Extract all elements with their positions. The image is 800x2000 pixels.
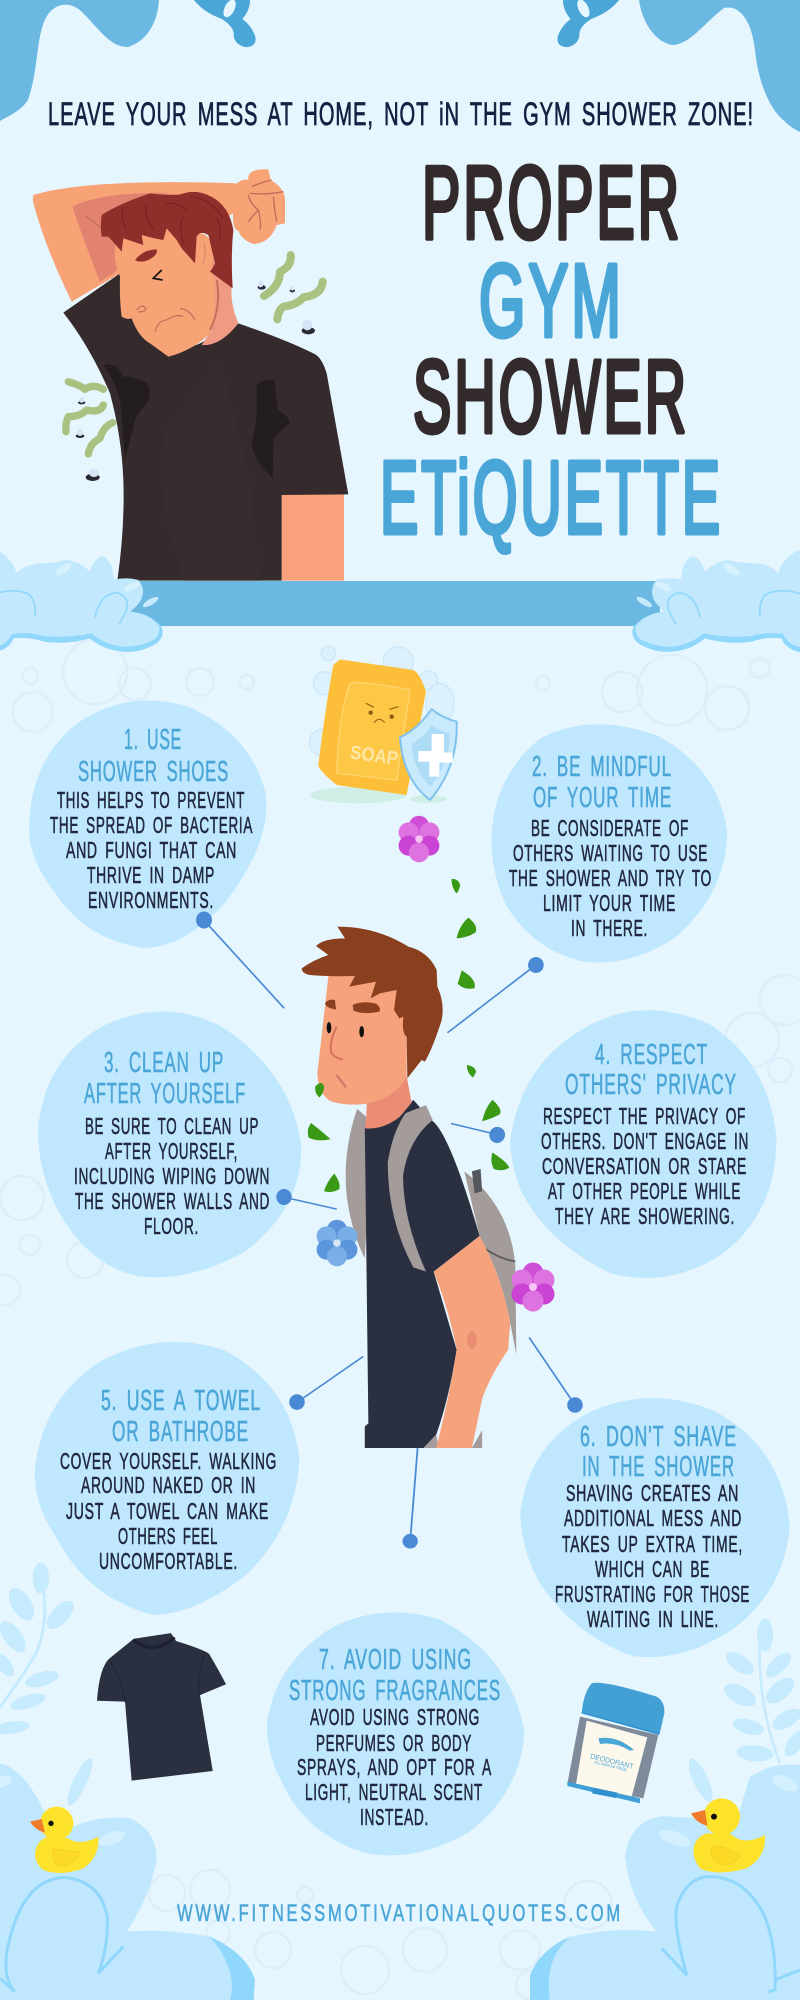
body text: PERFUMES OR BODY [316, 1730, 472, 1756]
body text: INCLUDING WIPING DOWN [74, 1163, 270, 1189]
icon: t-shirt [97, 1633, 226, 1781]
icon: deodorant stick [567, 1683, 664, 1803]
body text: ENVIRONMENTS. [88, 887, 214, 913]
panel: tip 1 shower shoes [29, 700, 266, 948]
icon: soap bar with shield [309, 646, 457, 803]
illustration: sweaty man smelling armpit [33, 169, 348, 581]
connector lines and dots upper [196, 913, 543, 1209]
body text [541, 1103, 749, 1229]
body text: OTHERS FEEL [118, 1523, 218, 1549]
body text: WHICH CAN BE [595, 1556, 710, 1582]
heading: 1. USE [124, 724, 182, 756]
heading [580, 1421, 737, 1483]
panel: tip 7 avoid strong fragrances [267, 1612, 524, 1855]
icon: soap bar with shield: SOAP [349, 742, 400, 770]
icon: deodorant stick: ALUMINUM FREE [594, 1759, 628, 1772]
body text: AVOID USING STRONG [310, 1704, 480, 1730]
heading: STRONG FRAGRANCES [289, 1675, 501, 1707]
body text: INSTEAD. [360, 1804, 429, 1830]
body text: BE SURE TO CLEAN UP [85, 1113, 259, 1139]
heading [84, 1047, 246, 1110]
panel: tip 5 towel or bathrobe [35, 1342, 305, 1615]
panel: tip 6 don't shave in the shower [520, 1397, 790, 1657]
body text: LIGHT, NEUTRAL SCENT [305, 1779, 483, 1805]
heading [565, 1039, 737, 1101]
body text: BE CONSIDERATE OF [531, 815, 689, 841]
body text: THIS HELPS TO PREVENT [57, 787, 245, 813]
heading [532, 751, 672, 814]
connector lines and dots lower [289, 1337, 583, 1549]
body text [50, 787, 253, 913]
illustration: man with backpack [302, 927, 516, 1448]
icon: rubber duck right [691, 1798, 765, 1872]
body text [297, 1704, 492, 1830]
top right water drip [639, 0, 800, 132]
heading: SHOWER SHOES [78, 756, 229, 788]
panel: tip 2 be mindful of your time [491, 724, 727, 973]
heading: OR BATHROBE [112, 1416, 249, 1448]
body text: UNCOMFORTABLE. [99, 1548, 238, 1574]
body text: AROUND NAKED OR IN [81, 1472, 256, 1498]
icon: deodorant stick: DEODORANT [590, 1752, 635, 1771]
body text: COVER YOURSELF. WALKING [60, 1448, 277, 1474]
heading: 7. AVOID USING [319, 1644, 472, 1676]
heading [78, 724, 229, 788]
splash right [557, 0, 619, 47]
heading [289, 1644, 501, 1707]
foam cloud left [0, 548, 163, 653]
leaves and flowers [308, 816, 554, 1312]
body text: JUST A TOWEL CAN MAKE [66, 1498, 269, 1524]
body text [60, 1448, 277, 1574]
splash left [194, 0, 256, 47]
heading [101, 1385, 261, 1448]
body text: THRIVE IN DAMP [87, 862, 215, 888]
foam cloud right [632, 548, 800, 653]
body text: IN THERE. [571, 915, 648, 941]
heading: OF YOUR TIME [533, 782, 672, 814]
body text [555, 1480, 750, 1632]
heading: AFTER YOURSELF [84, 1078, 246, 1110]
body text [74, 1113, 270, 1239]
body text: THE SHOWER WALLS AND [75, 1188, 270, 1214]
bottom right bubble foam [530, 1765, 800, 2000]
heading: 4. RESPECT [595, 1039, 708, 1071]
panel: tip 3 clean up after yourself [38, 1012, 301, 1277]
heading: 3. CLEAN UP [104, 1047, 224, 1079]
body text: AFTER YOURSELF, [105, 1138, 238, 1164]
title [380, 145, 723, 555]
body text: THE SPREAD OF BACTERIA [50, 812, 253, 838]
body text: SPRAYS, AND OPT FOR A [297, 1754, 492, 1780]
title: GYM [479, 243, 624, 358]
body text: AND FUNGI THAT CAN [66, 837, 237, 863]
decorative leaves left [0, 1562, 79, 1736]
decorative leaves right [684, 1618, 800, 1804]
body text [509, 815, 712, 941]
top left water drip [0, 0, 159, 121]
icon: rubber duck left [30, 1807, 98, 1873]
bottom left bubble foam [0, 1755, 255, 2000]
body text: LIMIT YOUR TIME [543, 890, 676, 916]
heading: 2. BE MINDFUL [532, 751, 672, 783]
header ribbon bar [120, 581, 660, 626]
panel: tip 4 respect others privacy [489, 1010, 777, 1278]
body text: FLOOR. [144, 1213, 199, 1239]
heading: 5. USE A TOWEL [101, 1385, 261, 1417]
